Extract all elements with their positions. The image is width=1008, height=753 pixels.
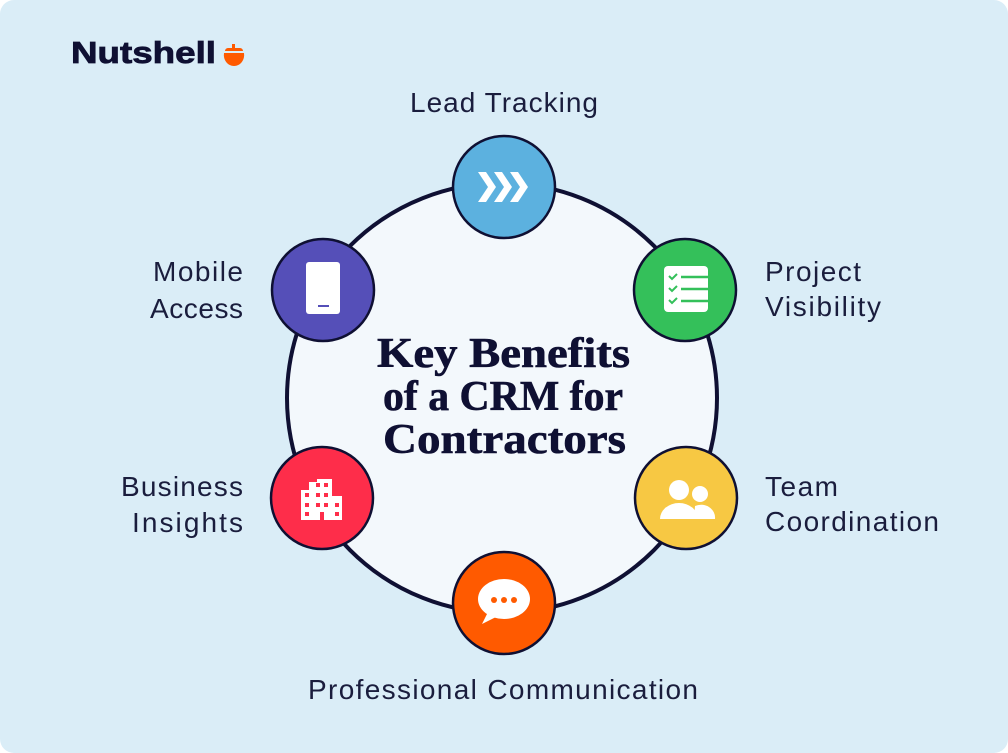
title: Key Benefits: [377, 331, 630, 377]
title: Contractors: [383, 417, 626, 463]
label: project visibility: [765, 256, 881, 322]
icon: professional communication: [453, 552, 555, 654]
icon: business insights: [271, 447, 373, 549]
label: business insights: Insights: [132, 507, 243, 538]
label: mobile access: Access: [150, 293, 243, 324]
icon: team coordination: [635, 447, 737, 549]
title: of a CRM for: [383, 374, 623, 420]
label: lead tracking: Lead Tracking: [410, 87, 598, 118]
label: mobile access: Mobile: [153, 256, 243, 287]
label: professional communication: Professional Communication: [308, 674, 698, 705]
label: business insights: Business: [121, 471, 243, 502]
icon: mobile access: [272, 239, 374, 341]
label: project visibility: Visibility: [765, 291, 881, 322]
title: [377, 331, 630, 463]
icon: project visibility: [634, 239, 736, 341]
icon: lead tracking: [453, 136, 555, 238]
logo: Nutshell: [71, 35, 216, 70]
label: team coordination: Coordination: [765, 506, 939, 537]
label: team coordination: Team: [765, 471, 838, 502]
label: business insights: [121, 471, 243, 538]
label: team coordination: [765, 471, 939, 537]
label: project visibility: Project: [765, 256, 861, 287]
labels: [121, 87, 939, 705]
central circle: [287, 183, 717, 613]
label: mobile access: [150, 256, 243, 324]
